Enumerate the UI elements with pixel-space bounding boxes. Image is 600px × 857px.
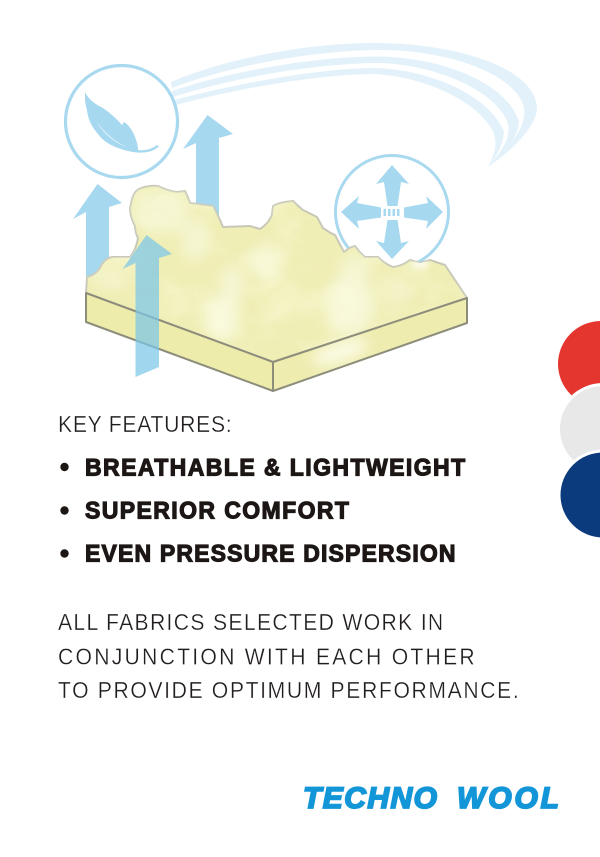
description paragraph — [58, 609, 519, 703]
description paragraph: TO PROVIDE OPTIMUM PERFORMANCE. — [58, 677, 519, 703]
mattress slab — [86, 293, 467, 391]
feature list — [60, 454, 466, 567]
icon: feather in circle — [66, 66, 178, 178]
logo: techno wool: WOOL — [457, 782, 559, 815]
arrow: tall back upward — [183, 115, 233, 230]
swoosh air flow lines — [171, 43, 537, 167]
description paragraph: ALL FABRICS SELECTED WORK IN — [58, 609, 443, 635]
feature: superior comfort: SUPERIOR COMFORT — [85, 497, 350, 524]
arrow: left upward — [73, 184, 122, 290]
arrow: front translucent upward — [122, 235, 172, 377]
feature: even pressure dispersion: EVEN PRESSURE DISPERSION — [85, 540, 456, 567]
logo: techno wool — [303, 782, 559, 815]
description paragraph: CONJUNCTION WITH EACH OTHER — [58, 643, 475, 670]
feature: breathable and lightweight: BREATHABLE & LIGHTWEIGHT — [85, 454, 466, 481]
logo: techno wool: TECHNO — [303, 782, 437, 815]
colour circles: red white navy — [558, 321, 600, 539]
icon: pressure dispersion arrows in circle — [336, 156, 448, 268]
heading: key features: KEY FEATURES: — [58, 411, 232, 437]
wool fleece on slab — [85, 184, 468, 361]
